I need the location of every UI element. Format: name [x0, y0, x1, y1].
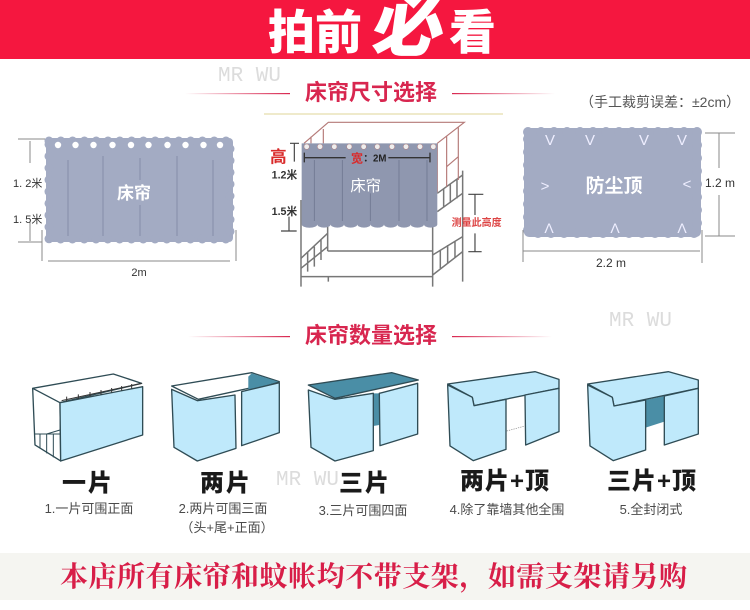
top shape: 防尘顶: [585, 174, 643, 197]
measure bracket: [468, 194, 483, 252]
dimension lines: [523, 133, 735, 263]
description: 2.两片可围三面: [179, 501, 267, 516]
label 1.2: 1. 2米: [13, 177, 42, 190]
cutting tolerance note: （手工裁剪误差：±2cm）: [580, 94, 740, 110]
icon: one panel: [33, 374, 143, 461]
top shape: [524, 128, 701, 237]
option 1: one panel: [33, 374, 143, 516]
width marker: 宽: [351, 150, 363, 165]
option 4: two panels plus top: [448, 372, 564, 517]
watermark: MR WU: [609, 310, 672, 333]
upper frame: [304, 122, 464, 192]
title: 三片+顶: [607, 468, 697, 495]
title: 一片: [62, 470, 114, 497]
description: 5.全封闭式: [620, 502, 682, 517]
label high: 高: [270, 146, 287, 166]
top shape: V: [545, 132, 555, 149]
icon: two panels: [172, 373, 279, 461]
bed frame: [301, 171, 463, 287]
description: 1.一片可围正面: [45, 501, 133, 516]
curtain: [302, 143, 437, 228]
curtain shape: [46, 138, 233, 242]
panel: dust top dimensions: [523, 128, 735, 270]
panel: bunk bed diagram: 床帘: [350, 178, 381, 195]
heading: curtain size: 床帘尺寸选择: [305, 80, 437, 105]
footer notice: [0, 553, 750, 600]
top shape: Λ: [677, 220, 687, 236]
top shape: <: [683, 176, 692, 193]
top shape: V: [585, 132, 595, 149]
note: （头+尾+正面）: [180, 520, 274, 535]
label 2.2m: 2.2 m: [596, 256, 626, 270]
panel: bunk bed diagram: [270, 122, 502, 287]
title: 两片+顶: [460, 468, 550, 495]
dimension lines: [18, 139, 236, 261]
curtain shape: 床帘: [117, 183, 151, 203]
title: 三片: [339, 470, 391, 497]
description: 4.除了靠墙其他全围: [450, 502, 564, 517]
top shape: >: [541, 178, 550, 195]
header banner: 看: [449, 6, 496, 59]
watermark: MR WU: [218, 65, 281, 88]
watermark: MR WU: [276, 469, 339, 492]
top shape: V: [677, 132, 687, 149]
width marker: ：2M: [363, 154, 386, 165]
label 1.5: 1.5米: [272, 205, 297, 218]
header banner: 拍前: [268, 6, 362, 59]
panel: curtain dimensions: [13, 138, 236, 279]
label 1.5: 1. 5米: [13, 213, 42, 226]
label width: 2m: [131, 267, 147, 279]
label 1.2m: 1.2 m: [705, 176, 735, 190]
footer notice: 本店所有床帘和蚊帐均不带支架，如需支架请另购: [60, 561, 687, 593]
option 5: three panels plus top: [588, 372, 698, 517]
icon: two panels plus top: [448, 372, 559, 461]
label 1.2: 1.2米: [272, 168, 297, 181]
description: 3.三片可围四面: [319, 503, 407, 518]
icon: three panels plus top: [588, 372, 698, 461]
header banner: [0, 0, 750, 66]
top shape: Λ: [610, 220, 620, 236]
option 3: three panels: [308, 373, 418, 518]
heading: curtain quantity: 床帘数量选择: [305, 323, 437, 348]
option 2: two panels: [172, 373, 279, 535]
measure label: 测量此高度: [452, 216, 502, 229]
top shape: Λ: [544, 220, 554, 236]
height markers: [281, 143, 299, 231]
icon: three panels: [308, 373, 418, 461]
width marker: [304, 150, 430, 165]
top shape: V: [639, 132, 649, 149]
title: 两片: [200, 470, 252, 497]
